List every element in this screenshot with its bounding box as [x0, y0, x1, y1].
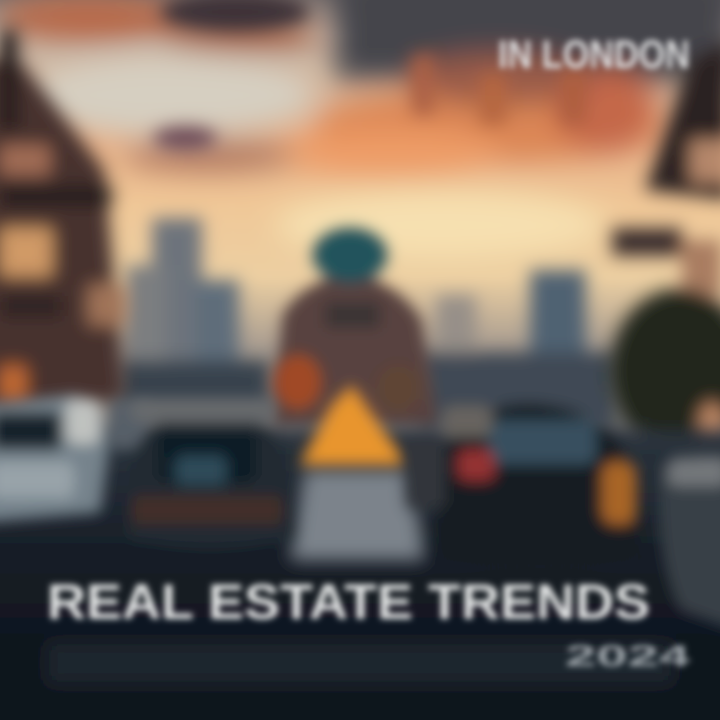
fire glow — [274, 354, 420, 465]
left building — [0, 30, 126, 420]
sky background — [0, 0, 720, 520]
car: far right — [659, 454, 720, 630]
car: left — [0, 395, 150, 522]
caption bottom right: 2024 — [565, 640, 691, 673]
car: center left — [125, 398, 294, 549]
skyline: right towers — [420, 270, 615, 427]
domed building — [272, 227, 438, 425]
title: REAL ESTATE TRENDS — [47, 574, 650, 630]
car: right — [405, 405, 640, 562]
street — [0, 430, 720, 720]
clouds — [0, 0, 720, 259]
bottom panel band — [45, 640, 675, 686]
road surface — [290, 470, 425, 560]
subtitle top right: IN LONDON — [498, 33, 690, 77]
skyline: left towers — [120, 218, 270, 415]
dark cloud accents — [153, 0, 586, 150]
right building and tree — [610, 40, 720, 452]
